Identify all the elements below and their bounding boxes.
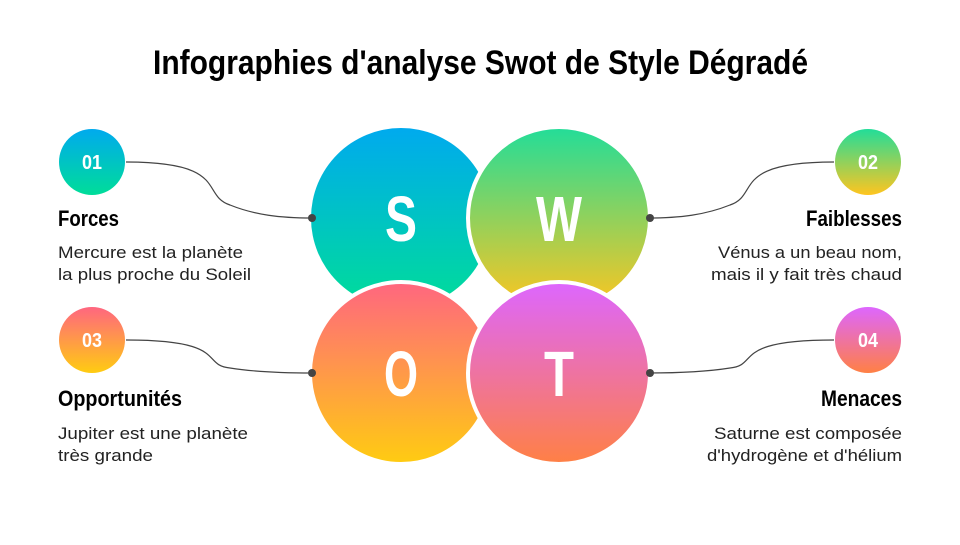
- text: Menaces: Menaces: [821, 386, 902, 411]
- badge 01: [59, 129, 125, 195]
- text: Opportunités: [58, 386, 248, 465]
- text: Opportunités: Opportunités: [58, 386, 182, 411]
- title: Infographies d'analyse Swot de Style Dégradé: [153, 44, 808, 82]
- circle O: [310, 282, 492, 464]
- circle O: O: [384, 338, 418, 410]
- badge 03: 03: [82, 330, 102, 352]
- circle T: T: [544, 338, 574, 410]
- circle W: W: [536, 183, 582, 255]
- circle W: [468, 127, 650, 309]
- text: Menaces: d'hydrogène et d'hélium: [707, 446, 902, 465]
- badge 04: [835, 307, 901, 373]
- circle T: [468, 282, 650, 464]
- text: Faiblesses: Faiblesses: [806, 206, 902, 231]
- text: Forces: Forces: [58, 206, 119, 231]
- text: Opportunités: très grande: [58, 446, 153, 465]
- badge 02: 02: [858, 152, 878, 174]
- text: Forces: Mercure est la planète: [58, 243, 243, 262]
- connector lines: [126, 162, 834, 373]
- text: Forces: [58, 206, 251, 284]
- text: Faiblesses: Vénus a un beau nom,: [718, 243, 902, 262]
- circle S: S: [385, 183, 417, 255]
- text: Faiblesses: mais il y fait très chaud: [711, 265, 902, 284]
- badge 02: [835, 129, 901, 195]
- connector dots: [308, 214, 654, 377]
- text: Forces: la plus proche du Soleil: [58, 265, 251, 284]
- badge 04: 04: [858, 330, 879, 352]
- badge 01: 01: [82, 152, 102, 174]
- number badges: [59, 129, 901, 373]
- SWOT circles: [310, 127, 650, 464]
- text: Menaces: [707, 386, 902, 465]
- text: Menaces: Saturne est composée: [714, 424, 902, 443]
- text: Opportunités: Jupiter est une planète: [58, 424, 248, 443]
- circle S: [311, 128, 491, 308]
- text: Faiblesses: [711, 206, 902, 284]
- badge 03: [59, 307, 125, 373]
